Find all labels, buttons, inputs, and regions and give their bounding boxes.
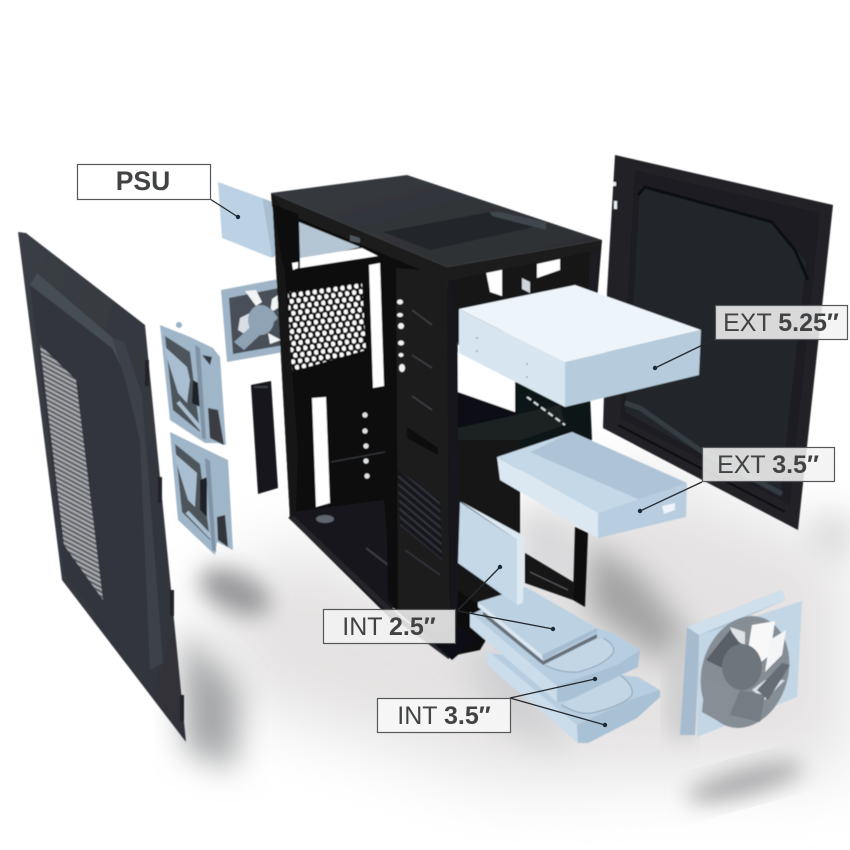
removable bracket xyxy=(251,381,278,494)
label: PSU: PSU xyxy=(116,166,170,196)
chassis: lower drive cage xyxy=(458,440,520,605)
drive: INT 3.5 lower xyxy=(487,650,660,743)
chassis: front bays xyxy=(396,268,450,640)
chassis: drive cage xyxy=(515,382,592,470)
drive: INT 3.5 upper xyxy=(470,600,640,702)
drive: INT 2.5 upright xyxy=(458,501,524,605)
label: EXT 5.25: EXT 5.25″ xyxy=(723,309,839,337)
label: INT 3.5: INT 3.5″ xyxy=(397,702,491,730)
chassis: base stub xyxy=(430,625,475,660)
drive: INT 2.5 flat xyxy=(478,587,597,660)
label: EXT 3.5 xyxy=(702,448,834,482)
chassis: floor xyxy=(293,500,394,622)
chassis: top window xyxy=(299,222,360,262)
drive: EXT 5.25 xyxy=(459,285,701,407)
chassis: divider xyxy=(382,262,398,610)
illustration xyxy=(18,155,833,743)
leader lines xyxy=(210,199,715,725)
side intake fan upper xyxy=(160,322,226,445)
chassis: right top section xyxy=(449,240,602,345)
label: INT 2.5: INT 2.5″ xyxy=(342,613,436,641)
front fan xyxy=(680,590,803,739)
chassis: slots xyxy=(369,263,384,388)
label: EXT 3.5: EXT 3.5″ xyxy=(717,451,819,479)
label: INT 2.5 xyxy=(324,610,456,644)
drive: EXT 3.5 xyxy=(497,432,687,538)
leader dots xyxy=(236,215,657,727)
side panel mesh vent xyxy=(40,345,103,600)
chassis xyxy=(271,175,602,660)
label: PSU xyxy=(78,164,210,200)
chassis: front column xyxy=(447,267,460,657)
label: INT 3.5 xyxy=(378,698,510,732)
floor shadows xyxy=(182,500,850,810)
right side panel xyxy=(603,155,833,530)
chassis: honeycomb mesh xyxy=(288,283,366,372)
PSU xyxy=(218,182,332,258)
side intake fan lower xyxy=(170,432,233,555)
chassis: top cover xyxy=(271,175,602,267)
rear fan xyxy=(221,278,284,362)
left side panel xyxy=(18,232,186,742)
chassis: interior silhouette xyxy=(272,195,458,657)
